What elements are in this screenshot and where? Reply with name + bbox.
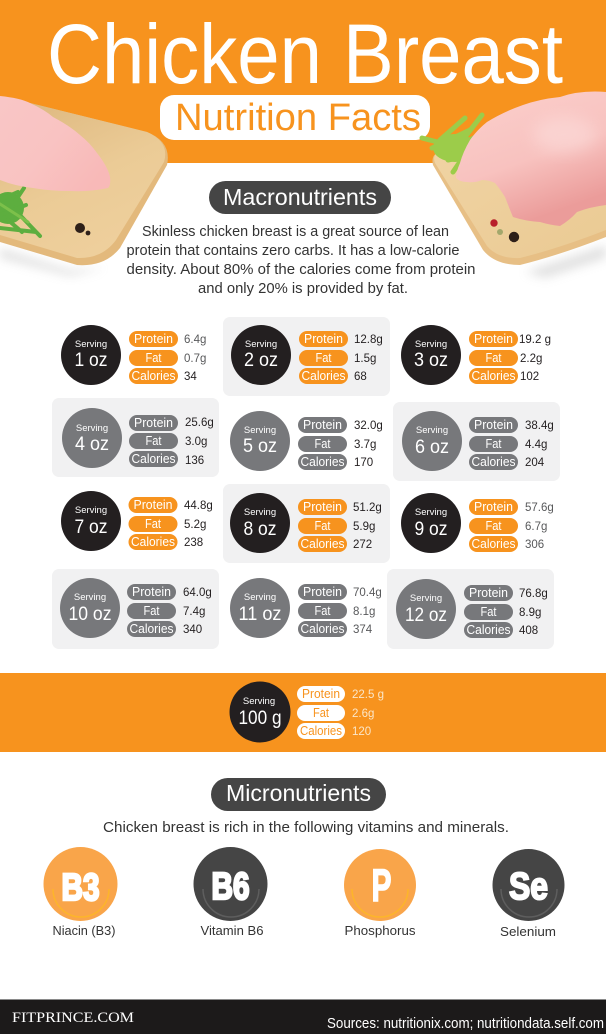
panel: 100 g serving band: 2.6g [352,708,374,720]
serving card: 1 oz: 34 [184,371,197,383]
serving card: 8 oz: 5.9g [353,521,375,533]
serving card: 1 oz: Calories [132,369,176,383]
serving card: 10 oz: Calories [130,622,174,636]
serving card: 7 oz: 238 [184,537,203,549]
intro paragraph: density. About 80% of the calories come from protein [126,261,476,278]
serving card: 11 oz: Serving [244,592,276,603]
serving card: 9 oz: 306 [525,539,544,551]
micronutrients intro text: Chicken breast is rich in the following vitamins and minerals. [103,819,509,836]
panel: 100 g serving band: 120 [352,726,371,738]
serving card: 6 oz: 6 oz [415,437,449,458]
serving card: 9 oz: 57.6g [525,502,554,514]
serving card: 4 oz: 4 oz [75,434,109,455]
serving card: 7 oz: 5.2g [184,519,206,531]
serving card: 1 oz: 1 oz [74,350,108,371]
serving card: 12 oz: 408 [519,625,538,637]
header band [0,0,606,163]
serving card: 11 oz: Fat [314,604,331,618]
subtitle badge: Nutrition Facts [175,97,421,139]
serving card: 7 oz: 7 oz [74,517,108,538]
serving card: 3 oz: Calories [472,369,516,383]
serving card: 9 oz: Protein [474,500,513,514]
serving card: 10 oz: 7.4g [183,606,205,618]
serving card: 12 oz: Fat [480,605,497,619]
serving card: 4 oz: 25.6g [185,417,214,429]
serving card: 2 oz: Calories [302,369,346,383]
serving card: 10 oz: Serving [74,592,106,603]
serving card: 6 oz: 38.4g [525,420,554,432]
serving card: 10 oz: Fat [144,604,160,618]
serving card: 5 oz [230,411,383,471]
panel: 100 g serving band [0,673,606,752]
serving card: 3 oz: Fat [486,351,502,365]
serving card: 9 oz: 9 oz [414,519,448,540]
serving card: 8 oz: Serving [244,507,276,518]
serving card: 5 oz: Protein [303,418,342,432]
serving card: 11 oz: 70.4g [353,587,382,599]
serving card: 7 oz [61,491,213,551]
heading: Micronutrients [211,778,386,811]
serving card: 5 oz: Fat [314,437,331,451]
serving card: 9 oz: Fat [486,519,502,533]
serving card: 11 oz: Calories [300,622,344,636]
icon: Niacin B3: B3 [62,867,100,909]
footer [0,999,606,1034]
serving card: 7 oz: Protein [134,498,173,512]
serving card: 1 oz: 0.7g [184,353,206,365]
serving card: 8 oz [223,484,390,563]
serving card: 4 oz: Fat [146,434,162,448]
serving card: 9 oz [401,493,554,553]
serving card: 5 oz: Serving [244,425,276,436]
serving card: 2 oz: Protein [304,332,343,346]
serving card: 8 oz: Protein [303,500,342,514]
serving card: 11 oz: 11 oz [238,604,282,625]
serving card: 2 oz: 2 oz [244,350,278,371]
serving card: 1 oz: Serving [75,339,107,350]
icon: Phosphorus: P [372,860,392,911]
footer: FITPRINCE.COM [12,1010,134,1026]
serving card: 7 oz: Calories [131,535,175,549]
serving card: 9 oz: Calories [472,537,516,551]
icon: Phosphorus: Phosphorus [344,923,416,938]
serving card: 8 oz: 272 [353,539,372,551]
title: Chicken Breast [47,7,563,101]
serving card: 2 oz: Serving [245,339,277,350]
serving card: 5 oz: 32.0g [354,420,383,432]
serving card: 6 oz: Serving [416,425,448,436]
serving card: 6 oz: Protein [474,418,513,432]
serving card: 10 oz: 10 oz [68,604,112,625]
serving card: 6 oz: Calories [472,455,516,469]
serving card: 1 oz: 6.4g [184,334,206,346]
serving card: 12 oz: 8.9g [519,607,541,619]
serving card: 3 oz: Protein [474,332,513,346]
heading: Macronutrients: Macronutrients [223,184,377,210]
serving card: 2 oz: 1.5g [354,353,376,365]
illustration: right cutting board with chicken [422,92,606,278]
serving card: 11 oz: 8.1g [353,606,375,618]
panel: 100 g serving band: Serving [243,696,275,707]
icon: Vitamin B6: B6 [212,866,250,908]
heading: Micronutrients: Micronutrients [226,780,371,806]
panel: 100 g serving band: Fat [313,706,329,720]
serving card: 2 oz: Fat [316,351,332,365]
serving card: 7 oz: Fat [145,517,161,531]
illustration: left cutting board with chicken [0,96,168,276]
serving card: 2 oz [223,317,390,396]
panel: 100 g serving band: Calories [300,724,342,738]
serving card: 2 oz: 12.8g [354,334,383,346]
serving card: 8 oz: 8 oz [244,519,276,540]
serving card: 3 oz: 19.2 g [519,334,551,346]
serving card: 6 oz: Fat [486,437,502,451]
serving card: 3 oz [401,325,551,385]
icon: Vitamin B6: Vitamin B6 [200,923,264,938]
serving card: 10 oz: 340 [183,624,202,636]
panel: 100 g serving band: 22.5 g [352,689,384,701]
serving card: 3 oz: 3 oz [414,350,448,371]
intro paragraph: and only 20% is provided by fat. [198,280,408,297]
serving card: 8 oz: Calories [300,537,344,551]
serving card: 6 oz: 204 [525,457,545,469]
serving card: 1 oz [61,325,206,385]
intro paragraph: Skinless chicken breast is a great source of lean [142,223,449,240]
serving card: 4 oz: 3.0g [185,436,207,448]
serving card: 3 oz: 102 [520,371,539,383]
serving card: 3 oz: 2.2g [520,353,542,365]
serving card: 10 oz: 64.0g [183,587,212,599]
serving card: 8 oz: 51.2g [353,502,382,514]
serving card: 9 oz: 6.7g [525,521,547,533]
serving card: 10 oz [52,569,219,649]
serving card: 12 oz: 76.8g [519,588,548,600]
icon: Selenium: Selenium [500,924,556,939]
serving card: 9 oz: Serving [415,507,447,518]
serving card: 4 oz: Serving [76,423,108,434]
serving card: 5 oz: Calories [300,455,344,469]
icon: Phosphorus [344,849,416,938]
serving card: 7 oz: 44.8g [184,500,213,512]
icon: Selenium [492,849,564,939]
serving card: 12 oz: Protein [469,586,508,600]
serving card: 5 oz: 170 [354,457,373,469]
icon: Niacin B3: Niacin (B3) [52,923,116,938]
serving card: 6 oz [393,402,560,481]
serving card: 2 oz: 68 [354,371,367,383]
serving card: 4 oz [52,398,219,477]
serving card: 12 oz: Serving [410,593,442,604]
serving card: 12 oz: Calories [466,623,510,637]
serving card: 5 oz: 3.7g [354,439,376,451]
serving card: 5 oz: 5 oz [243,436,277,457]
serving card: 6 oz: 4.4g [525,439,547,451]
serving card: 8 oz: Fat [314,519,331,533]
serving card: 4 oz: 136 [185,455,204,467]
icon: Vitamin B6 [194,847,268,938]
serving card: 1 oz: Fat [146,351,162,365]
serving card: 11 oz [230,578,382,638]
serving card: 4 oz: Calories [132,452,176,466]
serving card: 11 oz: 374 [353,624,373,636]
intro paragraph [126,223,476,297]
panel: 100 g serving band: Protein [302,687,340,701]
intro paragraph: protein that contains zero carbs. It has a low-calorie [126,242,460,259]
panel: 100 g serving band: 100 g [238,708,282,729]
serving card: 1 oz: Protein [134,332,173,346]
serving card: 12 oz [387,569,554,649]
icon: Selenium: Se [509,866,548,908]
serving card: 10 oz: Protein [132,585,171,599]
serving card: 3 oz: Serving [415,339,447,350]
heading: Macronutrients [209,181,391,214]
serving card: 4 oz: Protein [134,416,173,430]
icon: Niacin B3 [44,847,118,938]
serving card: 11 oz: Protein [303,585,342,599]
serving card: 7 oz: Serving [75,505,107,516]
serving card: 12 oz: 12 oz [405,605,447,626]
